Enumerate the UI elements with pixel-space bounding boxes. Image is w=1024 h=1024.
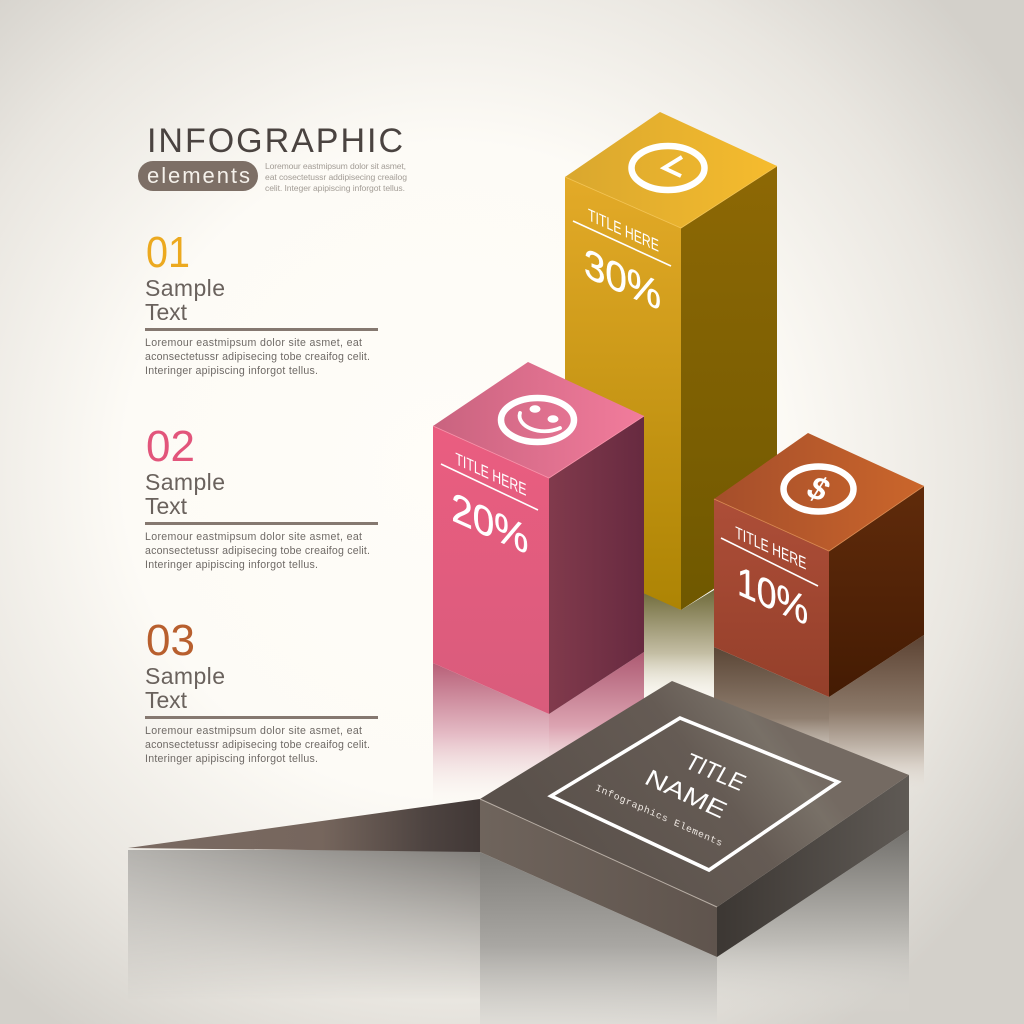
list item 03: Text [145,687,188,713]
intro text: eat cosectetussr addipisecing creailog [265,172,407,182]
list item 01: Sample [145,275,225,301]
icon: dollar coin [784,466,854,512]
list item 02: Text [145,493,188,519]
list item 02: aconsectetussr adipisecing tobe creaifog celit. [145,545,370,557]
title plinth [480,681,909,957]
brown bar 10% [714,433,924,697]
list item 02: 02 [146,422,195,471]
list item 02: Interinger apipiscing inforgot tellus. [145,559,318,571]
brown bar label: 10% [737,557,808,635]
brown bar label [721,522,818,635]
pink bar label [441,449,538,564]
list item 01 [145,228,378,377]
list item 01: Text [145,299,188,325]
list item 02: Loremour eastmipsum dolor site asmet, eat [145,531,362,543]
elements pill: elements [147,163,250,188]
list item 03 [145,616,378,765]
brown bar label: TITLE HERE [735,522,806,573]
pink bar 20% [433,362,644,714]
list item 01: aconsectetussr adipisecing tobe creaifog celit. [145,351,370,363]
plinth title: TITLE [681,748,750,796]
list item 01: 01 [146,228,190,277]
pink bar label: TITLE HERE [455,449,526,500]
list item 01: Interinger apipiscing inforgot tellus. [145,365,318,377]
list item 03: Loremour eastmipsum dolor site asmet, eat [145,725,362,737]
icon: dollar coin: $ [800,470,837,509]
list item 03: Interinger apipiscing inforgot tellus. [145,753,318,765]
list item 02 [145,422,378,571]
yellow bar 30% [565,112,777,610]
yellow bar label: 30% [584,240,661,320]
arrow spike [128,799,480,852]
list item 01: Loremour eastmipsum dolor site asmet, eat [145,337,362,349]
pink bar label: 20% [451,484,528,564]
icon: clock [632,146,704,190]
plinth title: NAME [641,764,731,823]
title frame [551,718,838,870]
plinth subtitle: Infographics Elements [594,783,724,849]
list item 03: aconsectetussr adipisecing tobe creaifog celit. [145,739,370,751]
floor reflections [128,590,924,1024]
list item 03: Sample [145,663,225,689]
icon: smiley [501,398,574,442]
list item 02: Sample [145,469,225,495]
yellow bar label: TITLE HERE [588,205,659,256]
plinth title [641,748,750,823]
intro text [265,161,407,193]
heading block [138,122,407,193]
list item 03: 03 [146,616,195,665]
title: INFOGRAPHIC [147,122,403,160]
yellow bar label [573,205,671,320]
intro text: celit. Integer apipiscing inforgot tellus. [265,183,405,193]
intro text: Loremour eastmipsum dolor sit asmet, [265,161,406,171]
